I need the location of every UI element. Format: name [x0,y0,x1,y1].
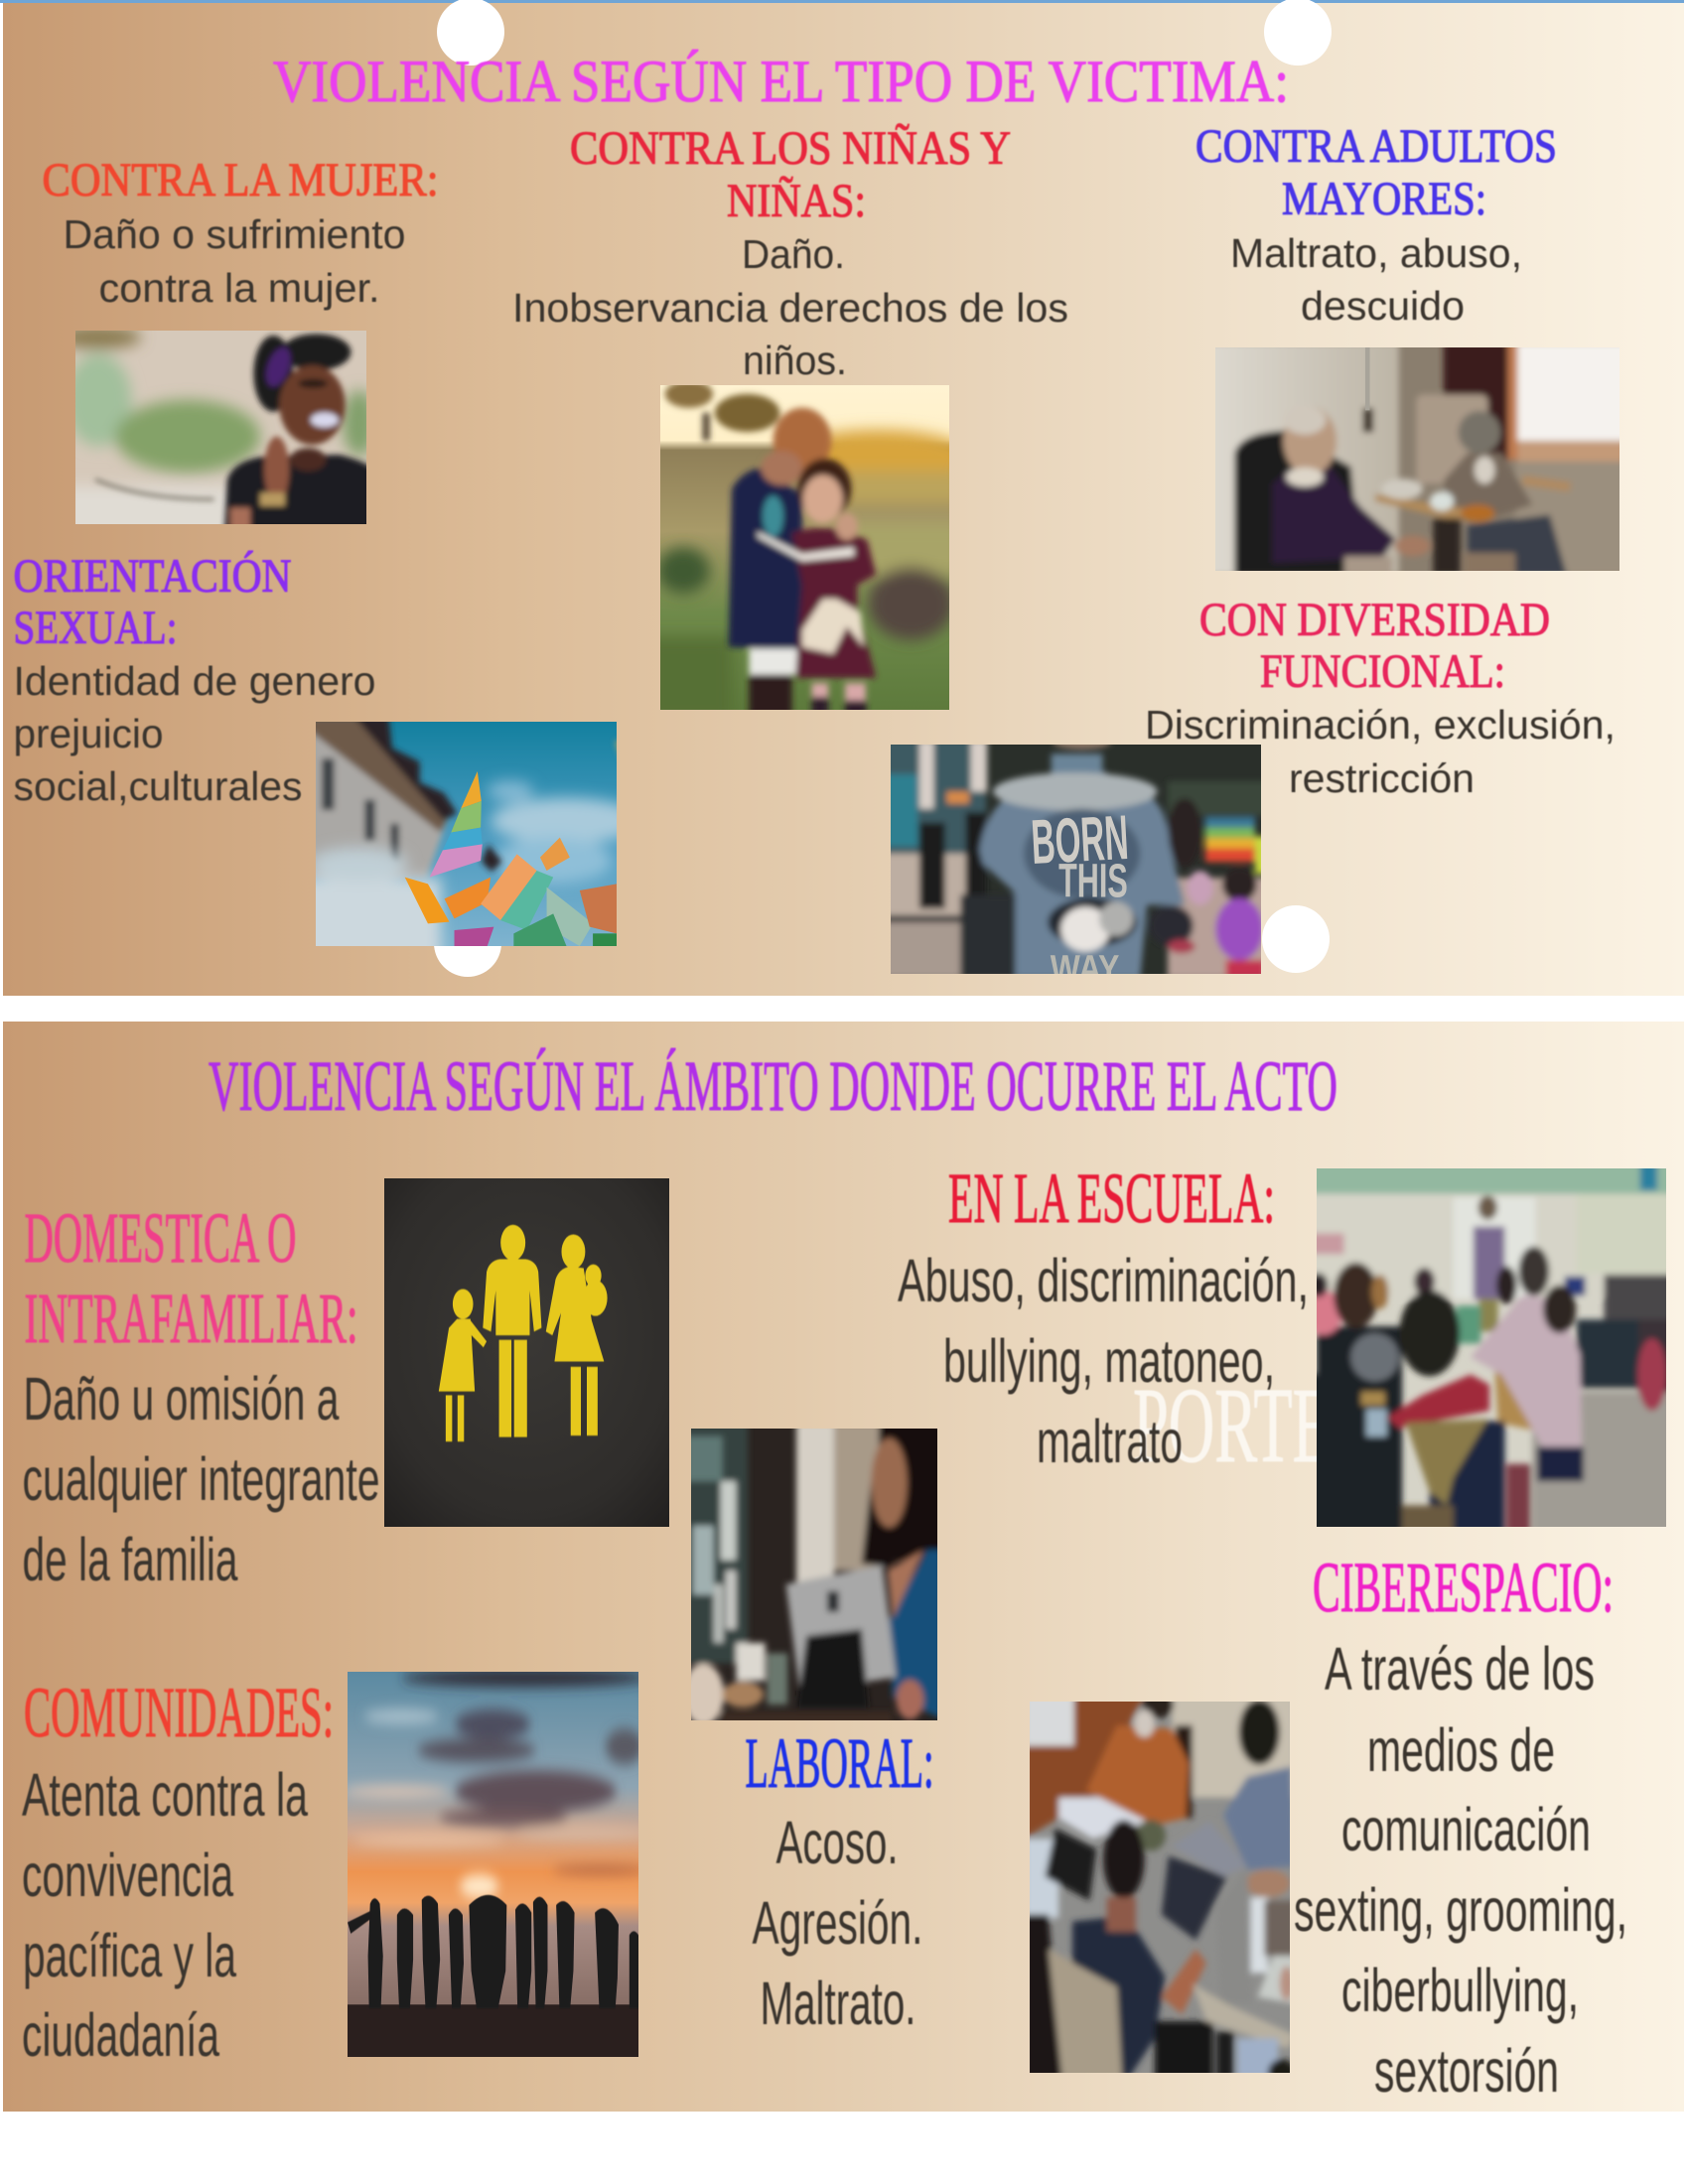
text block: ciberespacio: medios de [1367,1716,1555,1784]
text block: con diversidad funcional: restricción [1289,755,1475,801]
text block: con diversidad funcional: CON DIVERSIDAD [1199,594,1550,646]
text block: doméstica o intrafamiliar: DOMESTICA O [24,1198,296,1278]
photo: woman with laptop [691,1429,937,1720]
text block: orientación sexual: Identidad de genero [14,658,375,704]
text block: comunidades: pacífica y la [23,1922,236,1989]
photo: classroom [1317,1168,1666,1527]
photo: people at sunset [348,1672,638,2057]
text block: doméstica o intrafamiliar [22,1198,379,1593]
text block: orientación sexual [14,549,375,809]
title: VIOLENCIA SEGÚN EL TIPO DE VICTIMA: [273,49,1289,114]
decorative circle top left [437,0,504,66]
text block: orientación sexual: ORIENTACIÓN [14,549,292,603]
right page edge line [1684,0,1688,2184]
text block: laboral: Maltrato. [761,1970,915,2037]
text block: contra adultos mayores: Maltrato, abuso, [1230,230,1522,276]
text block: en la escuela: Abuso, discriminación, [898,1247,1309,1314]
text block: comunidades: convivencia [22,1842,233,1909]
text block: contra los niñas y niñas [512,122,1068,383]
decorative circle bottom left [434,909,501,977]
text block: contra los niñas y niñas: Inobservancia derechos de los [512,285,1068,331]
text block: doméstica o intrafamiliar: cualquier integrante [22,1445,379,1513]
photo: smiling woman [75,331,366,524]
text block: laboral: Acoso. [776,1809,898,1876]
text block: contra los niñas y niñas: NIÑAS: [727,175,866,227]
text block: en la escuela: maltrato [1037,1408,1183,1475]
photo: rainbow flags [316,722,617,946]
text block: ciberespacio: sextorsión [1374,2037,1559,2105]
photo: born this way jacket [891,745,1261,990]
text block: orientación sexual: SEXUAL: [14,602,177,654]
text block: con diversidad funcional: FUNCIONAL: [1260,645,1505,698]
text block: en la escuela: bullying, matoneo, [943,1327,1275,1395]
panel: violencia según el ámbito [3,1022,1684,2112]
text block: contra adultos mayores [1196,120,1557,329]
photo: born this way jacket: WAY [1051,947,1119,990]
text block: orientación sexual: prejuicio [14,711,163,756]
text block: contra adultos mayores: MAYORES: [1282,173,1486,225]
text block: ciberespacio [1294,1548,1627,2105]
text block: contra la mujer [42,154,439,311]
photo: born this way jacket: THIS [1058,854,1128,907]
text block: contra adultos mayores: CONTRA ADULTOS [1196,120,1557,173]
text block: contra los niñas y niñas: Daño. [742,231,845,277]
photo: elderly couple [1215,347,1619,571]
text block: comunidades [22,1673,334,2069]
panel: violencia según el tipo de víctima [3,0,1684,996]
text block: laboral: Agresión. [753,1889,923,1957]
text block: doméstica o intrafamiliar: Daño u omisión a [24,1365,340,1433]
text block: contra la mujer: Daño o sufrimiento [64,211,406,257]
faded white word behind text: PORTE [1133,1367,1332,1485]
text block: contra los niñas y niñas: CONTRA LOS NIÑAS Y [570,122,1011,175]
photo: family pictogram on asphalt [384,1178,669,1527]
text block: ciberespacio: ciberbullying, [1341,1957,1579,2024]
text block: comunidades: COMUNIDADES: [24,1673,334,1752]
photo: team with laptops [1030,1702,1290,2073]
decorative circle top right [1264,0,1332,66]
text block: con diversidad funcional [1145,594,1616,801]
photo: born this way jacket: BORN [1030,803,1130,878]
text block: en la escuela: EN LA ESCUELA: [948,1159,1275,1238]
panel background [3,3,1684,996]
text block: con diversidad funcional: Discriminación, exclusión, [1145,702,1616,748]
text block: contra la mujer: contra la mujer. [99,265,379,311]
text block: laboral: LABORAL: [745,1723,933,1803]
text block: contra adultos mayores: descuido [1301,283,1465,329]
text block: contra la mujer: CONTRA LA MUJER: [42,154,439,206]
text block: orientación sexual: social,culturales [14,763,302,809]
text block: doméstica o intrafamiliar: de la familia [22,1526,238,1593]
text block: comunidades: ciudadanía [22,2001,219,2069]
text block: laboral [745,1723,933,2037]
text block: contra los niñas y niñas: niños. [743,338,847,383]
decorative circle bottom right [1262,905,1330,973]
photo: children reading [660,385,949,710]
top accent line [0,0,1688,3]
text block: comunidades: Atenta contra la [22,1761,308,1829]
text block: doméstica o intrafamiliar: INTRAFAMILIAR: [24,1279,357,1358]
panel background [3,1022,1684,2112]
text block: en la escuela [898,1159,1309,1475]
